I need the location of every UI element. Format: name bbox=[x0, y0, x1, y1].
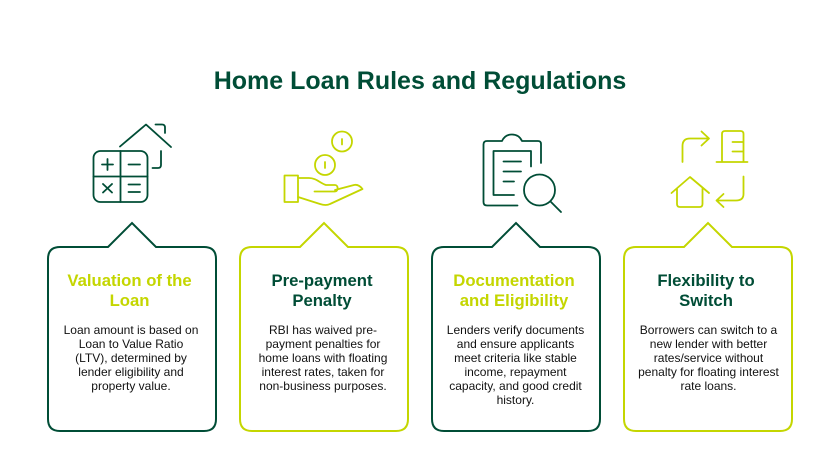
body text: property value. bbox=[91, 379, 171, 393]
body text: capacity, and good credit bbox=[449, 379, 582, 393]
panel: flexibility to switch bbox=[624, 223, 792, 431]
body text: new lender with better bbox=[650, 337, 767, 351]
heading: Switch bbox=[679, 291, 733, 310]
card outline bbox=[240, 223, 408, 431]
heading: Valuation of the bbox=[67, 271, 192, 290]
panel: documentation and eligibility bbox=[432, 223, 600, 431]
heading: Penalty bbox=[292, 291, 352, 310]
card outline bbox=[432, 223, 600, 431]
heading: Pre-payment bbox=[271, 271, 373, 290]
heading: and Eligibility bbox=[460, 291, 569, 310]
heading: Documentation bbox=[453, 271, 575, 290]
body text: Loan amount is based on bbox=[64, 323, 198, 337]
body text: penalty for floating interest bbox=[638, 365, 780, 379]
body text: non-business purposes. bbox=[259, 379, 387, 393]
body text: and ensure applicants bbox=[457, 337, 574, 351]
body text: payment penalties for bbox=[266, 337, 380, 351]
body text: interest rates, taken for bbox=[262, 365, 384, 379]
body text: meet criteria like stable bbox=[454, 351, 577, 365]
body text: Lenders verify documents bbox=[447, 323, 584, 337]
body text: income, repayment bbox=[464, 365, 567, 379]
panel: pre-payment penalty bbox=[240, 223, 408, 431]
body text: Borrowers can switch to a bbox=[640, 323, 778, 337]
heading: Loan bbox=[110, 291, 149, 310]
body text: rates/service without bbox=[654, 351, 764, 365]
body text: lender eligibility and bbox=[78, 365, 184, 379]
panel: valuation of the loan bbox=[48, 223, 216, 431]
body text: home loans with floating bbox=[259, 351, 387, 365]
title: Home Loan Rules and Regulations bbox=[214, 67, 626, 95]
body text: Loan to Value Ratio bbox=[79, 337, 184, 351]
icon: clipboard with magnifier bbox=[484, 134, 561, 212]
card outline bbox=[48, 223, 216, 431]
icon: switching arrows, house and door bbox=[672, 131, 748, 207]
icon: hand with coins bbox=[284, 132, 362, 205]
body text: history. bbox=[497, 393, 534, 407]
body text: RBI has waived pre- bbox=[269, 323, 377, 337]
heading: Flexibility to bbox=[657, 271, 755, 290]
icon: calculator and house bbox=[94, 124, 171, 202]
card outline bbox=[624, 223, 792, 431]
body text: rate loans. bbox=[680, 379, 737, 393]
body text: (LTV), determined by bbox=[75, 351, 187, 365]
